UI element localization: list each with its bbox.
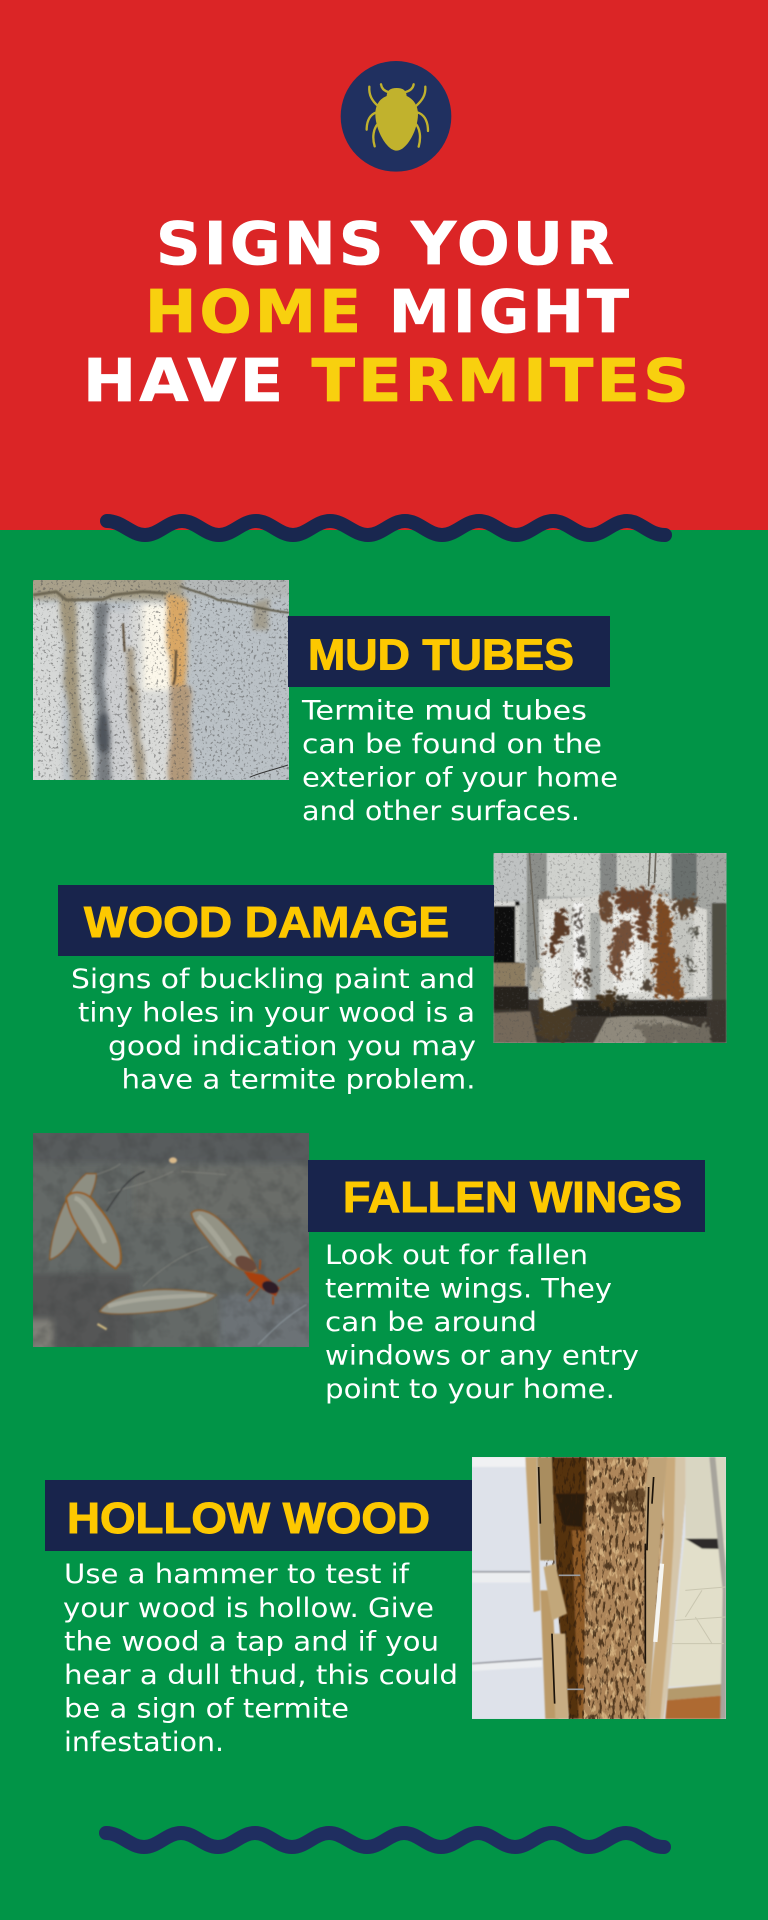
text: hollow wood description: hear a dull thud, this could [64,1660,458,1691]
heading banner: wood damage: WOOD DAMAGE [84,898,449,947]
title: HAVE TERMITES [83,346,692,415]
text: mud tubes description [301,696,618,827]
text: fallen wings description: Look out for fallen [325,1240,588,1271]
text: hollow wood description: be a sign of termite [64,1694,349,1724]
text: wood damage description: Signs of buckling paint and [71,964,475,995]
icon: termite bug in navy circle [341,61,451,172]
text: fallen wings description: can be around [325,1307,537,1338]
photo: mud tubes on concrete [33,580,289,780]
title: SIGNS YOUR [156,209,617,278]
text: mud tubes description: Termite mud tubes [301,696,587,726]
text: mud tubes description: can be found on the [302,729,602,760]
photo: fallen termite wings on grey floor [33,1133,309,1347]
text: mud tubes description: and other surfaces. [302,796,580,827]
panel: red header background [0,0,768,530]
text: hollow wood description: Use a hammer to test if [64,1559,411,1590]
text: fallen wings description: windows or any entry [325,1340,639,1372]
text: wood damage description [71,964,476,1096]
text: hollow wood description: the wood a tap and if you [64,1626,439,1658]
text: fallen wings description: point to your home. [325,1374,615,1405]
text: fallen wings description: termite wings. They [325,1274,612,1304]
heading banner: mud tubes: MUD TUBES [308,630,574,680]
heading banner: fallen wings [308,1160,705,1232]
heading banner: hollow wood [45,1480,472,1551]
text: wood damage description: tiny holes in your wood is a [78,998,475,1028]
text: hollow wood description: your wood is hollow. Give [63,1593,434,1624]
panel: green body background [0,530,768,1920]
panel: hollow wood [45,1457,726,1758]
panel: mud tubes [26,573,618,827]
text: hollow wood description: infestation. [64,1727,224,1758]
wave divider top [107,521,665,535]
title: HOME MIGHT [145,277,632,346]
text: hollow wood description [63,1559,458,1758]
photo: damaged painted siding [494,853,726,1043]
heading banner: mud tubes [288,616,610,687]
text: fallen wings description [325,1240,639,1405]
heading banner: fallen wings: FALLEN WINGS [343,1173,682,1222]
text: wood damage description: good indication you may [108,1031,476,1062]
photo: termite-hollowed door frame [472,1457,726,1719]
wave divider bottom [106,1833,664,1847]
heading banner: hollow wood: HOLLOW WOOD [67,1494,430,1543]
text: wood damage description: have a termite problem. [122,1064,476,1096]
panel: fallen wings [26,1126,705,1405]
title [83,209,692,415]
panel: wood damage [58,853,726,1096]
heading banner: wood damage [58,885,494,956]
text: mud tubes description: exterior of your home [302,762,618,794]
